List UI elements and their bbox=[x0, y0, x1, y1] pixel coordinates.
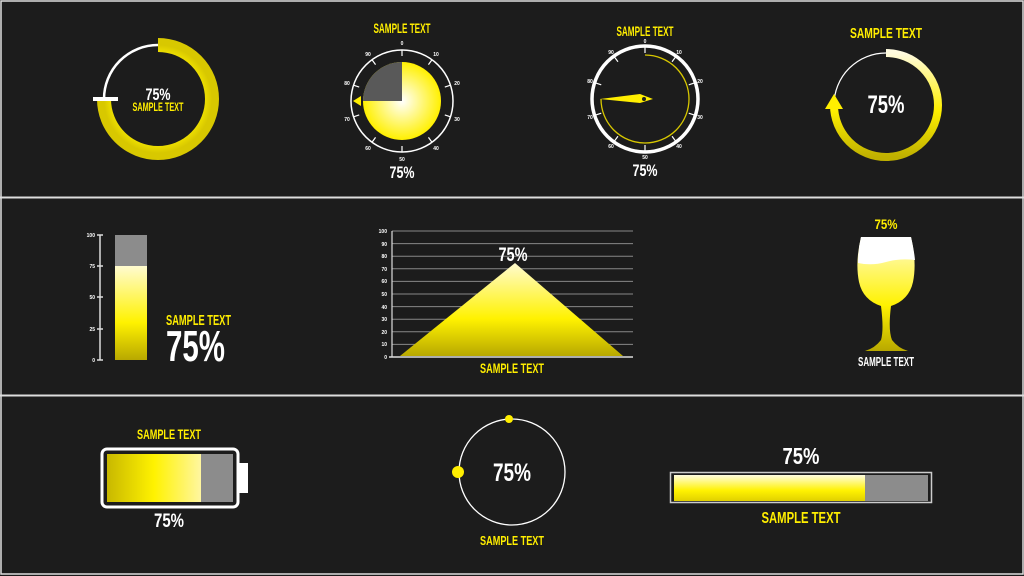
vertical bar gauge: 100 bbox=[87, 233, 95, 239]
dial pie gauge: 30 bbox=[454, 117, 460, 123]
vertical bar gauge: 25 bbox=[89, 327, 95, 333]
triangle area chart: 30 bbox=[381, 317, 387, 323]
dial pie gauge: SAMPLE TEXT bbox=[374, 20, 431, 36]
horizontal progress bar: SAMPLE TEXT bbox=[762, 510, 841, 527]
wine glass: SAMPLE TEXT bbox=[858, 354, 914, 369]
battery gauge: 75% bbox=[154, 511, 184, 532]
dial needle gauge: 60 bbox=[608, 144, 614, 150]
vertical bar gauge: 75% bbox=[166, 322, 225, 371]
dial pie gauge: 10 bbox=[433, 52, 439, 58]
vertical bar gauge bbox=[87, 233, 231, 371]
wine glass: 75% bbox=[874, 216, 898, 232]
vertical bar gauge: SAMPLE TEXT bbox=[166, 312, 231, 329]
circle dots gauge bbox=[452, 415, 565, 548]
triangle area chart bbox=[379, 229, 633, 376]
vertical bar gauge: 0 bbox=[92, 358, 95, 364]
dial pie gauge: 40 bbox=[433, 146, 439, 152]
horizontal progress bar bbox=[670, 443, 932, 527]
triangle area chart: 40 bbox=[381, 305, 387, 311]
circle dots gauge: SAMPLE TEXT bbox=[480, 533, 544, 548]
arrow ring gauge: SAMPLE TEXT bbox=[850, 25, 922, 42]
triangle area chart: 100 bbox=[379, 229, 387, 235]
battery gauge bbox=[102, 426, 248, 532]
dial needle gauge bbox=[587, 23, 703, 180]
dial needle gauge: 80 bbox=[587, 79, 593, 85]
triangle area chart: 10 bbox=[381, 342, 387, 348]
dial pie gauge bbox=[344, 20, 460, 182]
dial pie gauge: 75% bbox=[390, 163, 414, 182]
triangle area chart: 0 bbox=[384, 355, 387, 361]
donut gauge: SAMPLE TEXT bbox=[132, 100, 184, 114]
dial pie gauge: 50 bbox=[399, 157, 405, 163]
dial needle gauge: 0 bbox=[644, 39, 647, 45]
arrow ring gauge bbox=[825, 25, 938, 157]
donut gauge: 75% bbox=[146, 85, 170, 104]
dial needle gauge: 30 bbox=[697, 115, 703, 121]
battery gauge: SAMPLE TEXT bbox=[137, 426, 201, 442]
dial pie gauge: 70 bbox=[344, 117, 350, 123]
donut gauge bbox=[93, 45, 212, 153]
dial needle gauge: 75% bbox=[632, 161, 658, 180]
dial pie gauge: 20 bbox=[454, 81, 460, 87]
dial pie gauge: 60 bbox=[365, 146, 371, 152]
dial needle gauge: 90 bbox=[608, 50, 614, 56]
triangle area chart: 60 bbox=[381, 279, 387, 285]
dial pie gauge: 90 bbox=[365, 52, 371, 58]
dial needle gauge: 70 bbox=[587, 115, 593, 121]
circle dots gauge: 75% bbox=[493, 459, 531, 487]
triangle area chart: 20 bbox=[381, 330, 387, 336]
arrow ring gauge: 75% bbox=[868, 91, 904, 119]
dial pie gauge: 80 bbox=[344, 81, 350, 87]
triangle area chart: 90 bbox=[381, 242, 387, 248]
triangle area chart: SAMPLE TEXT bbox=[480, 360, 544, 376]
dial needle gauge: 40 bbox=[676, 144, 682, 150]
triangle area chart: 75% bbox=[498, 245, 528, 266]
triangle area chart: 70 bbox=[381, 267, 387, 273]
dial needle gauge: 20 bbox=[697, 79, 703, 85]
dial pie gauge: 0 bbox=[401, 41, 404, 47]
triangle area chart: 80 bbox=[381, 254, 387, 260]
vertical bar gauge: 75 bbox=[89, 264, 95, 270]
wine glass bbox=[857, 216, 915, 369]
dial needle gauge: 10 bbox=[676, 50, 682, 56]
triangle area chart: 50 bbox=[381, 292, 387, 298]
dial needle gauge: 50 bbox=[642, 155, 648, 161]
dial needle gauge: SAMPLE TEXT bbox=[616, 23, 674, 39]
horizontal progress bar: 75% bbox=[782, 443, 820, 469]
vertical bar gauge: 50 bbox=[89, 295, 95, 301]
